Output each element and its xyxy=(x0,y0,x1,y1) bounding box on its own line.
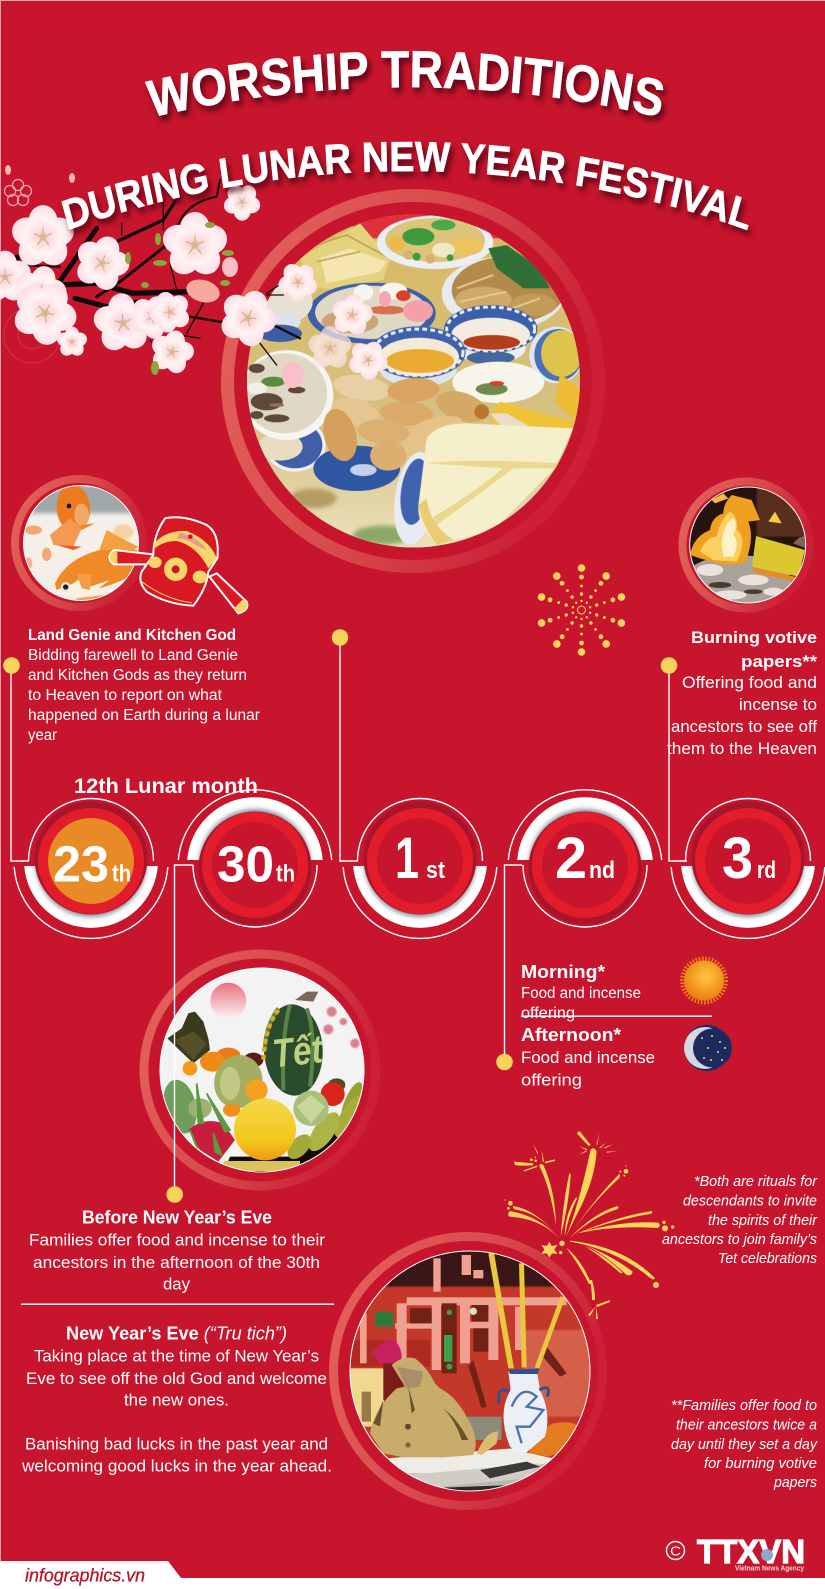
footnote: rituals: the spirits of their xyxy=(708,1213,818,1229)
icon: Kitchen God fan xyxy=(109,517,247,613)
top rolls xyxy=(300,223,390,291)
rice cake xyxy=(418,423,573,545)
logo: TTXVN: TTXVN xyxy=(697,1533,805,1570)
text: before New Year's Eve xyxy=(29,1208,325,1294)
text: morning offering: offering xyxy=(521,1005,575,1022)
divider xyxy=(21,1304,334,1305)
text: Land Genie and Kitchen God: and Kitchen Gods as they return xyxy=(28,667,247,684)
chicken offering photo with ring xyxy=(334,1236,602,1506)
text: burning votive papers: Offering food and xyxy=(682,673,817,692)
icon: sun xyxy=(682,959,726,1002)
buds xyxy=(5,165,433,388)
text: burning votive papers: papers** xyxy=(741,652,817,671)
date node: 30th xyxy=(178,790,332,927)
date node: 23rd: th xyxy=(112,860,131,888)
timeline dots xyxy=(3,629,677,1203)
top bowl xyxy=(377,216,493,269)
sauce bowl right xyxy=(464,345,526,360)
text: afternoon offering: Afternoon* xyxy=(521,1025,621,1045)
date node: 30th: th xyxy=(276,860,295,888)
date node: 2nd: 2 xyxy=(555,826,587,891)
text: New Year's Eve: welcoming good lucks in the year ahead. xyxy=(21,1456,332,1476)
footnote: rituals: *Both are rituals for xyxy=(694,1174,818,1190)
left upper bowl xyxy=(266,283,313,320)
date node: 2nd: nd xyxy=(589,857,615,884)
text: Land Genie and Kitchen God: happened on Earth during a lunar xyxy=(28,707,260,724)
footnote: rituals: Tet celebrations xyxy=(718,1251,817,1267)
title: DURING LUNAR NEW YEAR FESTIVAL xyxy=(61,142,755,238)
text: New Year's Eve xyxy=(21,1324,332,1476)
footnote: votive papers: day until they set a day xyxy=(671,1437,818,1453)
text: burning votive papers: incense to xyxy=(739,695,817,714)
date node: 23rd xyxy=(14,799,168,938)
footnote: votive papers: **Families offer food to xyxy=(671,1398,817,1414)
leaves xyxy=(125,222,234,375)
text: burning votive papers: them to the Heaven xyxy=(667,739,817,758)
date node: 23rd: 23 xyxy=(53,836,109,892)
blossom branch xyxy=(0,165,433,389)
left plate xyxy=(308,283,436,344)
text: before New Year's Eve: Families offer food and incense to their xyxy=(29,1230,325,1250)
text: burning votive papers: ancestors to see off xyxy=(671,717,817,736)
text: afternoon offering: Food and incense xyxy=(521,1048,655,1067)
text: afternoon offering xyxy=(521,1025,655,1090)
footnote: votive papers: for burning votive xyxy=(704,1456,817,1472)
timeline connector lines xyxy=(11,638,687,1194)
fruit photo with ring: Tết xyxy=(270,1027,326,1076)
text: morning offering: Morning* xyxy=(521,962,605,982)
date node: 3rd: 3 xyxy=(722,826,753,891)
date node: 1st: 1 xyxy=(395,826,419,891)
date node: 1st: st xyxy=(426,857,445,884)
footnote: rituals xyxy=(662,1174,818,1267)
date node: 3rd: rd xyxy=(757,857,776,884)
text: before New Year's Eve: day xyxy=(163,1274,190,1294)
footnote: rituals: ancestors to join family’s xyxy=(662,1232,817,1248)
middle bowl xyxy=(380,353,457,387)
noodle plate xyxy=(442,257,565,330)
text: burning votive papers: Burning votive xyxy=(691,628,817,647)
yellow cakes xyxy=(492,402,573,432)
text: morning offering xyxy=(521,962,641,1022)
text: New Year's Eve: New Year’s Eve (“Tru tich”) xyxy=(66,1324,287,1344)
text: morning offering: Food and incense xyxy=(521,985,641,1002)
logo: TTXVN: C xyxy=(670,1544,681,1558)
title: WORSHIP TRADITIONS xyxy=(144,50,670,124)
main photo: food tray xyxy=(240,205,590,555)
fruit photo with ring xyxy=(144,954,376,1186)
white dish xyxy=(452,362,544,403)
date node: 1st xyxy=(343,799,497,938)
outline flower xyxy=(4,180,32,206)
text: burning votive papers xyxy=(667,628,817,758)
date node: 2nd xyxy=(508,790,662,927)
votive paper fire photo with ring xyxy=(682,482,810,612)
text: New Year's Eve: the new ones. xyxy=(124,1390,229,1410)
date node: 30th: 30 xyxy=(217,836,274,892)
faint decorative swirl behind blossoms xyxy=(4,307,60,363)
text: New Year's Eve: Eve to see off the old God and welcome xyxy=(26,1369,327,1388)
left porridge bowl xyxy=(264,418,326,472)
icon: sparkle burst xyxy=(537,564,626,656)
text: before New Year's Eve: ancestors in the afternoon of the 30th xyxy=(33,1253,320,1272)
text: New Year's Eve: Taking place at the time of New Year’s xyxy=(34,1346,319,1366)
branches xyxy=(13,180,300,370)
text: Land Genie and Kitchen God: year xyxy=(28,727,57,744)
date node: 3rd xyxy=(671,799,825,938)
fruit bowl far right xyxy=(529,327,584,383)
footer: infographics.vn: infographics.vn xyxy=(25,1566,145,1586)
icon: moon xyxy=(684,1025,732,1071)
spring rolls xyxy=(334,374,388,401)
footnote: rituals: descendants to invite xyxy=(683,1194,817,1210)
icon: fireworks xyxy=(504,1131,674,1284)
title xyxy=(61,50,755,238)
blossoms xyxy=(8,205,78,271)
footnote: votive papers: papers xyxy=(773,1475,817,1491)
extra firework sparks xyxy=(588,1276,659,1319)
footnote: votive papers: their ancestors twice a xyxy=(676,1418,817,1434)
logo: TTXVN: Vietnam News Agency xyxy=(735,1564,805,1572)
label: 12th Lunar month: 12th Lunar month xyxy=(74,775,258,798)
text: Land Genie and Kitchen God: Land Genie and Kitchen God xyxy=(28,627,236,644)
morning / afternoon divider xyxy=(521,1016,712,1017)
roll plate xyxy=(313,446,400,491)
text: Land Genie and Kitchen God: Bidding farewell to Land Genie xyxy=(28,647,238,664)
goldfish photo with ring xyxy=(15,479,143,607)
text: Land Genie and Kitchen God: to Heaven to report on what xyxy=(28,687,223,704)
rice cake plate xyxy=(394,452,426,545)
text: New Year's Eve: Banishing bad lucks in the past year and xyxy=(25,1434,328,1454)
text: afternoon offering: offering xyxy=(521,1070,582,1090)
text: before New Year's Eve: Before New Year’s Eve xyxy=(82,1208,272,1228)
main photo ring xyxy=(228,196,598,566)
text: Land Genie and Kitchen God xyxy=(28,627,260,744)
footer: white tab xyxy=(0,1561,825,1589)
footnote: votive papers xyxy=(671,1398,818,1491)
